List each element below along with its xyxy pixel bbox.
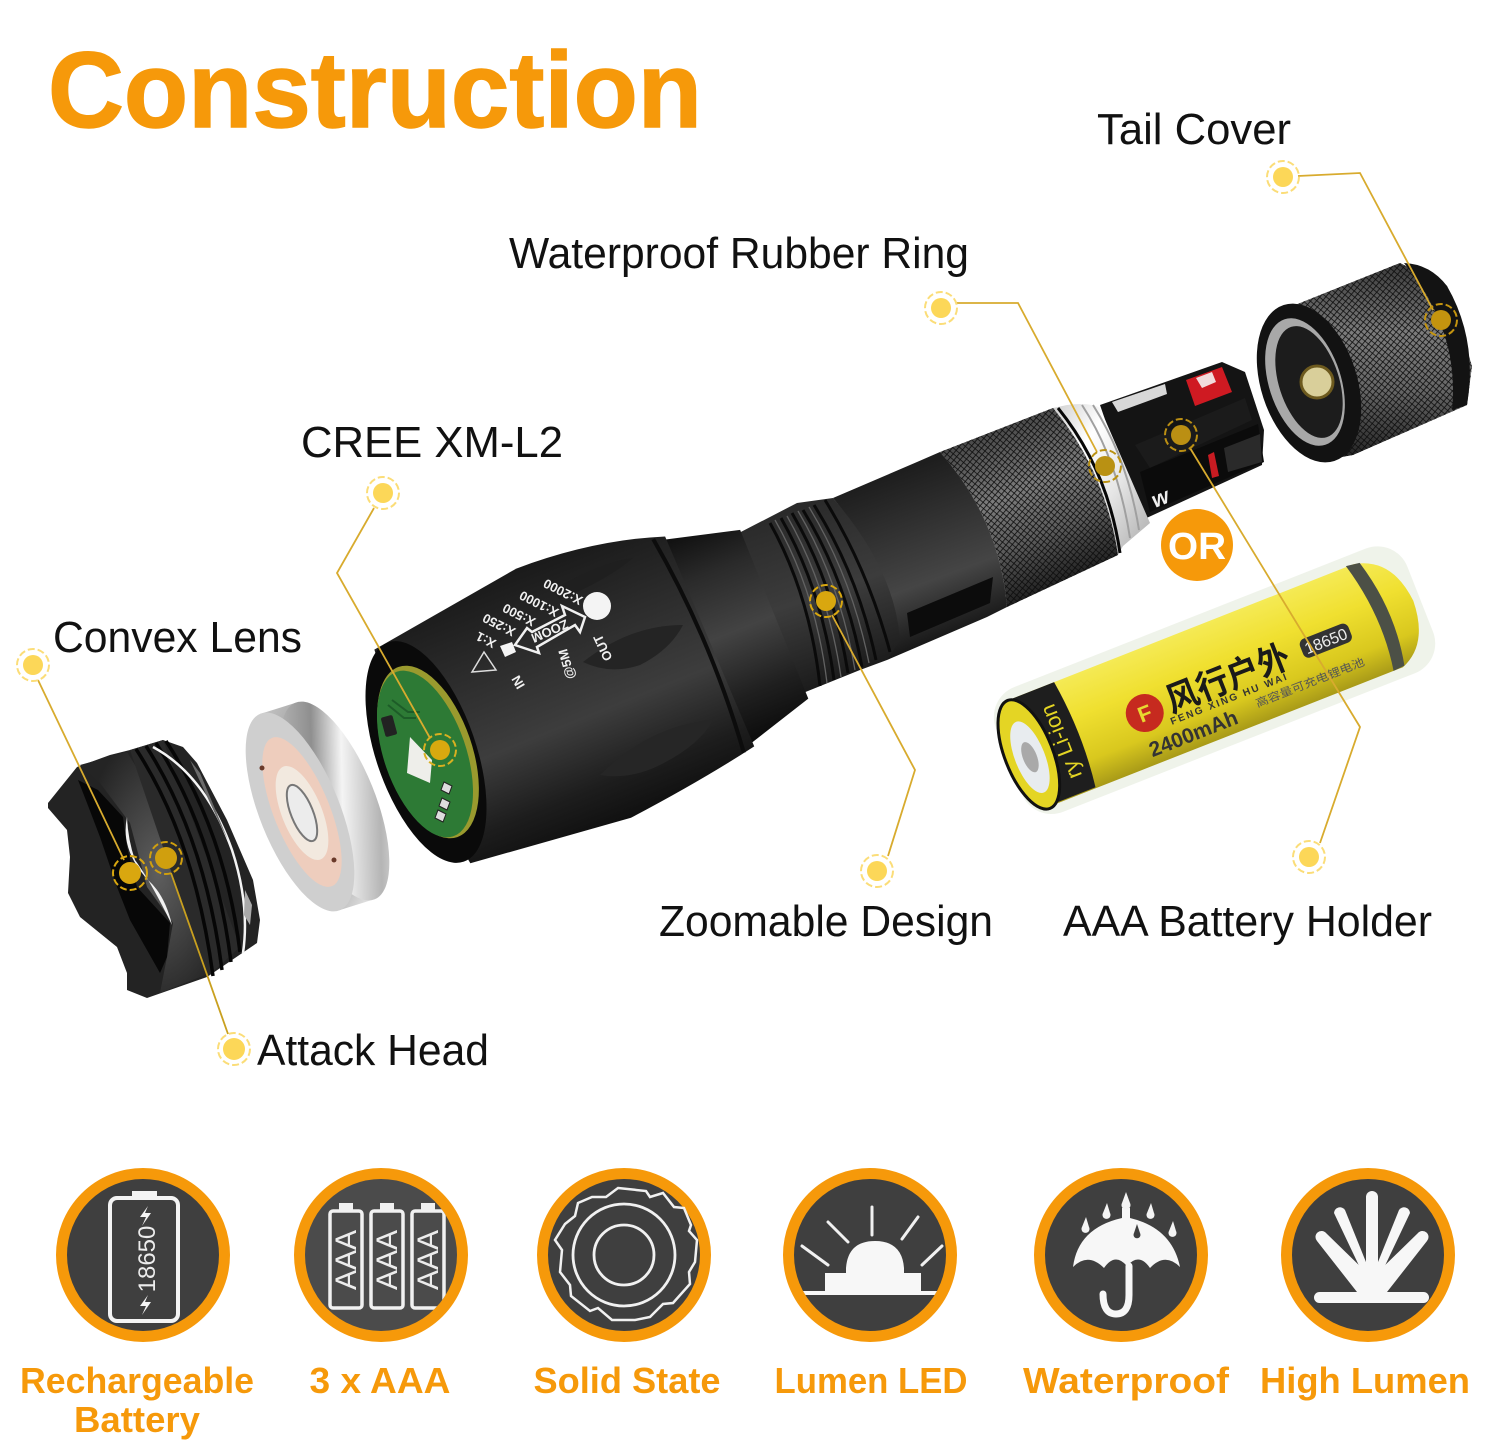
icon: waterproof umbrella xyxy=(1040,1174,1202,1336)
label: Convex Lens: Convex Lens xyxy=(53,613,302,662)
head markings: X:1 xyxy=(474,629,498,651)
AAA battery holder xyxy=(1100,362,1264,521)
pointer: Waterproof Rubber Ring xyxy=(925,292,1121,482)
tube xyxy=(833,452,1007,660)
pointer: Tail Cover xyxy=(1267,161,1457,336)
18650 rechargeable battery: 高容量可充电锂电池 xyxy=(1253,655,1367,710)
18650 rechargeable battery: ry Li-ion xyxy=(1035,701,1087,783)
knurled grip xyxy=(940,408,1120,607)
AAA battery holder: w xyxy=(1148,482,1174,513)
18650 rechargeable battery: 风行户外 xyxy=(1161,638,1296,721)
head seam xyxy=(653,536,749,754)
front cavity xyxy=(78,780,170,973)
head grip flutes xyxy=(553,558,713,776)
18650 rechargeable battery: F xyxy=(1134,699,1156,728)
head markings: X:500 xyxy=(500,600,538,630)
label: Tail Cover: Tail Cover xyxy=(1097,105,1291,154)
icon: rechargeable battery xyxy=(62,1174,224,1336)
18650 rechargeable battery: 18650 xyxy=(1303,626,1350,658)
caption: Waterproof: Waterproof xyxy=(1023,1360,1230,1401)
attack head xyxy=(48,740,260,998)
head xyxy=(363,511,762,885)
icon: high lumen xyxy=(1286,1174,1450,1336)
icon: 3 x AAA batteries: AAA xyxy=(330,1230,363,1290)
icon: 3 x AAA batteries xyxy=(300,1174,462,1336)
head markings: X:2000 xyxy=(541,576,585,608)
icon: 3 x AAA batteries: AAA xyxy=(412,1230,445,1290)
ribbed collar xyxy=(735,498,900,700)
label: AAA Battery Holder: AAA Battery Holder xyxy=(1063,897,1432,946)
caption: High Lumen: High Lumen xyxy=(1260,1360,1470,1401)
icon: rechargeable battery: 18650 xyxy=(134,1226,161,1292)
neck xyxy=(654,510,817,752)
label: Waterproof Rubber Ring: Waterproof Rubber Ring xyxy=(509,229,969,278)
pointer: Convex Lens xyxy=(17,649,147,890)
label: Zoomable Design: Zoomable Design xyxy=(659,897,993,946)
head markings: OUT xyxy=(590,632,616,664)
pointer: AAA Battery Holder xyxy=(1165,419,1360,873)
title: Construction xyxy=(48,29,702,150)
pointer: Attack Head xyxy=(150,842,250,1065)
icon: solid state xyxy=(542,1174,706,1336)
pointer: Zoomable Design xyxy=(810,585,915,887)
18650 rechargeable battery xyxy=(982,537,1445,825)
caption: Solid State: Solid State xyxy=(534,1360,720,1401)
18650 rechargeable battery: FENG XING HU WAI xyxy=(1169,671,1290,728)
18650 rechargeable battery: 2400mAh xyxy=(1146,706,1241,762)
icon: 3 x AAA batteries: AAA xyxy=(371,1230,404,1290)
label: CREE XM-L2: CREE XM-L2 xyxy=(301,418,563,467)
OR badge xyxy=(1161,509,1233,581)
head markings: @5M xyxy=(555,647,578,681)
head markings: ZOOM xyxy=(529,616,571,646)
caption: Rechargeable Battery: Battery xyxy=(74,1399,200,1440)
label: Attack Head: Attack Head xyxy=(257,1026,489,1075)
convex lens xyxy=(223,688,412,925)
flashlight body xyxy=(363,485,825,885)
head markings xyxy=(472,576,616,692)
thread grooves xyxy=(130,740,240,977)
tail cover xyxy=(1238,263,1472,476)
caption: Rechargeable Battery xyxy=(20,1360,254,1440)
head markings: X:250 xyxy=(480,610,518,640)
silver rubber ring thread xyxy=(1053,404,1150,555)
LED board face xyxy=(341,626,511,878)
icon: lumen LED xyxy=(788,1174,952,1336)
caption: 3 x AAA: 3 x AAA xyxy=(310,1360,450,1401)
caption: Lumen LED: Lumen LED xyxy=(774,1360,968,1401)
head markings: X:1000 xyxy=(517,588,561,620)
OR badge: OR xyxy=(1168,526,1226,568)
head markings: IN xyxy=(508,673,528,692)
caption: Rechargeable Battery: Rechargeable xyxy=(20,1360,254,1401)
pointer: CREE XM-L2 xyxy=(337,477,456,766)
